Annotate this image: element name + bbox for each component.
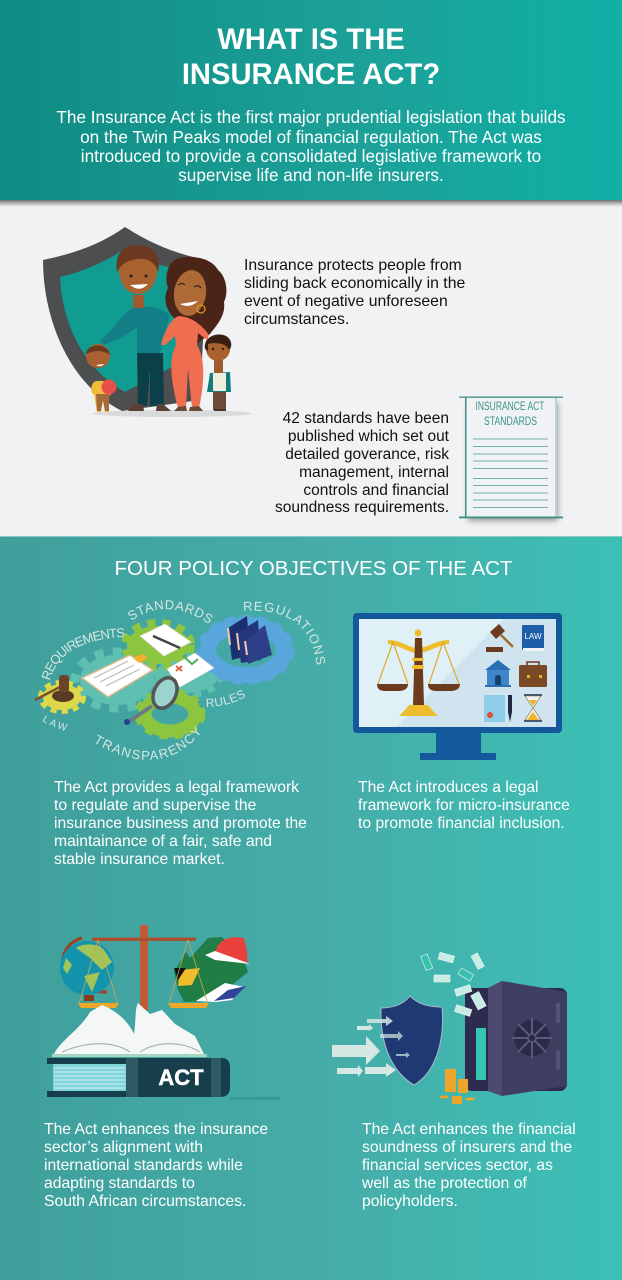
- ground shadow: [92, 410, 252, 417]
- gear: yellow: [41, 683, 83, 711]
- girl: [86, 344, 116, 412]
- text: objective 2: The Act introduces a legal: [358, 779, 539, 796]
- icon: briefcase: [519, 662, 547, 687]
- shield: [381, 996, 443, 1085]
- gear: green lower: [138, 692, 202, 736]
- title: INSURANCE ACT?: [182, 59, 440, 91]
- book shadow: [230, 1097, 280, 1100]
- insurance protects text: circumstances.: [244, 311, 349, 328]
- scales: [377, 630, 460, 716]
- text: objective 3: international standards while: [44, 1157, 243, 1174]
- illustration: book, globe, scale: [47, 925, 280, 1100]
- icon: certificate and pen: [484, 695, 512, 722]
- coins: [439, 1069, 475, 1104]
- safe wheel: [512, 1018, 552, 1058]
- text: objective 4: The Act enhances the financial: [362, 1121, 576, 1138]
- text: objective 2: to promote financial inclusion.: [358, 815, 565, 832]
- gear labels: REGULATIONS: [244, 602, 326, 664]
- text: objective 3: South African circumstances.: [44, 1193, 246, 1210]
- illustration: family with shield: [43, 227, 252, 417]
- gear labels: LAW: [42, 715, 68, 730]
- man: [100, 245, 171, 411]
- text: objective 2: [358, 779, 570, 832]
- intro text: on the Twin Peaks model of financial regulation. The Act was: [80, 127, 542, 147]
- insurance protects text: Insurance protects people from: [244, 257, 462, 274]
- clipboard: [82, 654, 153, 697]
- icon: hourglass: [524, 695, 542, 721]
- boy: [205, 335, 231, 411]
- gear labels: [42, 600, 326, 760]
- open book: [47, 1003, 230, 1097]
- text: objective 4: policyholders.: [362, 1193, 458, 1210]
- title: [182, 24, 440, 91]
- illustration: monitor: [353, 613, 562, 760]
- text: objective 2: framework for micro-insurance: [358, 797, 570, 814]
- text: objective 4: well as the protection of: [361, 1175, 527, 1192]
- standards text: 42 standards have been: [283, 410, 449, 427]
- text: objective 3: [44, 1121, 268, 1210]
- map of South Africa: [174, 937, 250, 1002]
- intro text: supervise life and non-life insurers.: [178, 165, 444, 185]
- text: objective 3: adapting standards to: [44, 1175, 195, 1192]
- text: objective 4: soundness of insurers and the: [362, 1139, 572, 1156]
- intro text: The Insurance Act is the first major prudential legislation that builds: [56, 107, 566, 127]
- gear labels: TRANSPARENCY: [96, 726, 200, 760]
- gear: blue: [201, 619, 291, 681]
- heading: FOUR POLICY OBJECTIVES OF THE ACT: [115, 557, 513, 580]
- icon: bank building: [485, 660, 511, 687]
- header panel: [0, 0, 622, 207]
- book label: ACT: [158, 1065, 204, 1090]
- icon: standards document: STANDARDS: [484, 414, 537, 428]
- monitor stand: [420, 733, 496, 760]
- standards text: controls and financial: [303, 482, 449, 499]
- arrows: [332, 1016, 410, 1077]
- illustration: safe and shield: [332, 952, 567, 1104]
- gear labels: RULES: [206, 690, 245, 708]
- title: WHAT IS THE: [217, 24, 405, 56]
- gavel: [35, 675, 74, 702]
- globe: [60, 938, 114, 1001]
- icon: law book: [522, 625, 544, 651]
- balance scale: [78, 925, 209, 1010]
- icon: standards document: [459, 396, 563, 521]
- monitor frame: [353, 613, 562, 733]
- standards text: [275, 410, 450, 516]
- gear: green top: [125, 623, 191, 667]
- gear labels: STANDARDS: [128, 600, 212, 623]
- shield: [43, 227, 207, 411]
- standards text: management, internal: [299, 464, 449, 481]
- gear: teal right: [154, 655, 220, 695]
- woman: [161, 257, 226, 411]
- magnifier: [124, 674, 182, 725]
- insurance protects text: sliding back economically in the: [244, 275, 465, 292]
- insurance protects text: event of negative unforeseen: [244, 293, 448, 310]
- binders: [228, 616, 272, 664]
- intro text: introduced to provide a consolidated legislative framework to: [81, 146, 541, 166]
- standards text: soundness requirements.: [275, 499, 449, 516]
- standards text: published which set out: [288, 428, 450, 445]
- banknotes: [421, 952, 486, 1016]
- intro text: [56, 107, 566, 185]
- text: objective 3: sector’s alignment with: [44, 1139, 203, 1156]
- text: objective 1: [54, 779, 307, 868]
- text: objective 1: stable insurance market.: [54, 851, 225, 868]
- gear: teal left: [75, 652, 159, 708]
- text: objective 1: maintainance of a fair, safe and: [54, 833, 272, 850]
- text: objective 1: insurance business and promote the: [54, 815, 307, 832]
- standards text: detailed goverance, risk: [285, 446, 449, 463]
- icon: gavel: [486, 624, 513, 652]
- text: objective 3: The Act enhances the insurance: [44, 1121, 268, 1138]
- insurance protects text: [244, 257, 465, 328]
- document and pen: [140, 624, 191, 656]
- illustration: gears: [34, 600, 326, 760]
- text: objective 1: The Act provides a legal framework: [54, 779, 299, 796]
- safe: [465, 981, 567, 1096]
- text: objective 1: to regulate and supervise the: [54, 797, 257, 814]
- text: objective 4: [361, 1121, 576, 1210]
- text: objective 4: financial services sector, as: [362, 1157, 553, 1174]
- open book with marks: [167, 653, 214, 687]
- icon: law book: LAW: [524, 632, 542, 641]
- gear labels: REQUIREMENTS: [42, 628, 124, 680]
- icon: standards document: INSURANCE ACT: [476, 399, 545, 413]
